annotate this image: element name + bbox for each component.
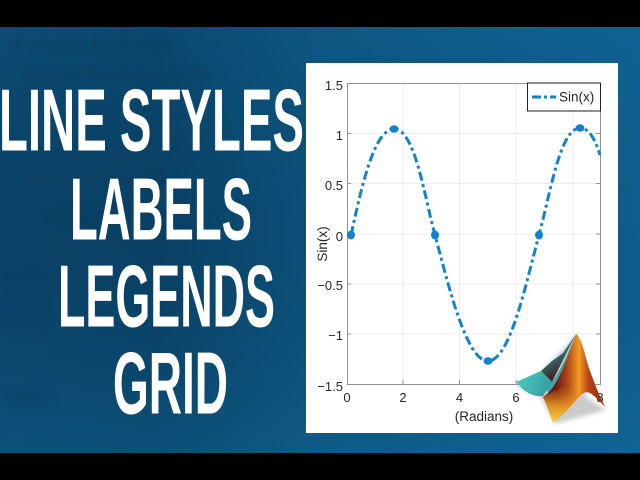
bottom letterbox bar xyxy=(0,453,640,480)
blurred code background text xyxy=(10,37,212,187)
chart axes xyxy=(347,84,600,384)
heading line: LEGENDS: LEGENDS xyxy=(58,246,275,346)
y axis label: Sin(x) xyxy=(315,226,330,262)
x axis tick labels: 4 xyxy=(456,390,463,405)
heading: topic list xyxy=(0,70,304,432)
y axis tick labels xyxy=(317,78,343,394)
y axis tick labels: 1.5 xyxy=(325,78,343,93)
chart grid lines xyxy=(347,83,600,384)
blurred code background text: plot(x,'Radians',100); xyxy=(24,64,212,81)
icon: MATLAB logo xyxy=(516,334,606,424)
data markers xyxy=(347,124,584,365)
top letterbox bar xyxy=(0,0,640,27)
y axis tick labels: 0.5 xyxy=(325,178,343,193)
x axis tick labels: 8 xyxy=(596,390,604,405)
y axis tick labels: −1.5 xyxy=(317,379,343,394)
blurred code background text: if class( Andreas) xyxy=(10,37,172,54)
y axis tick labels: 1 xyxy=(336,128,343,143)
x axis label: (Radians) xyxy=(455,409,513,424)
x axis tick labels: 0 xyxy=(343,390,351,405)
blurred dark code streaks xyxy=(0,212,100,403)
heading line: LABELS: LABELS xyxy=(70,160,252,258)
legend xyxy=(528,83,600,111)
x axis tick labels: 2 xyxy=(399,390,407,405)
y axis tick labels: −1 xyxy=(328,328,343,343)
legend: Sin(x) xyxy=(559,90,594,104)
y axis tick labels: 0 xyxy=(336,229,343,244)
x axis tick labels xyxy=(343,390,604,405)
blurred code background text: end if else end xyxy=(24,170,164,187)
y axis tick labels: −0.5 xyxy=(317,278,343,293)
x axis tick labels: 6 xyxy=(512,390,520,405)
heading line: GRID: GRID xyxy=(113,334,228,432)
line series: Sin(x) xyxy=(351,128,600,361)
heading line: LINE STYLES: LINE STYLES xyxy=(0,70,304,170)
panel: chart card xyxy=(306,63,618,433)
